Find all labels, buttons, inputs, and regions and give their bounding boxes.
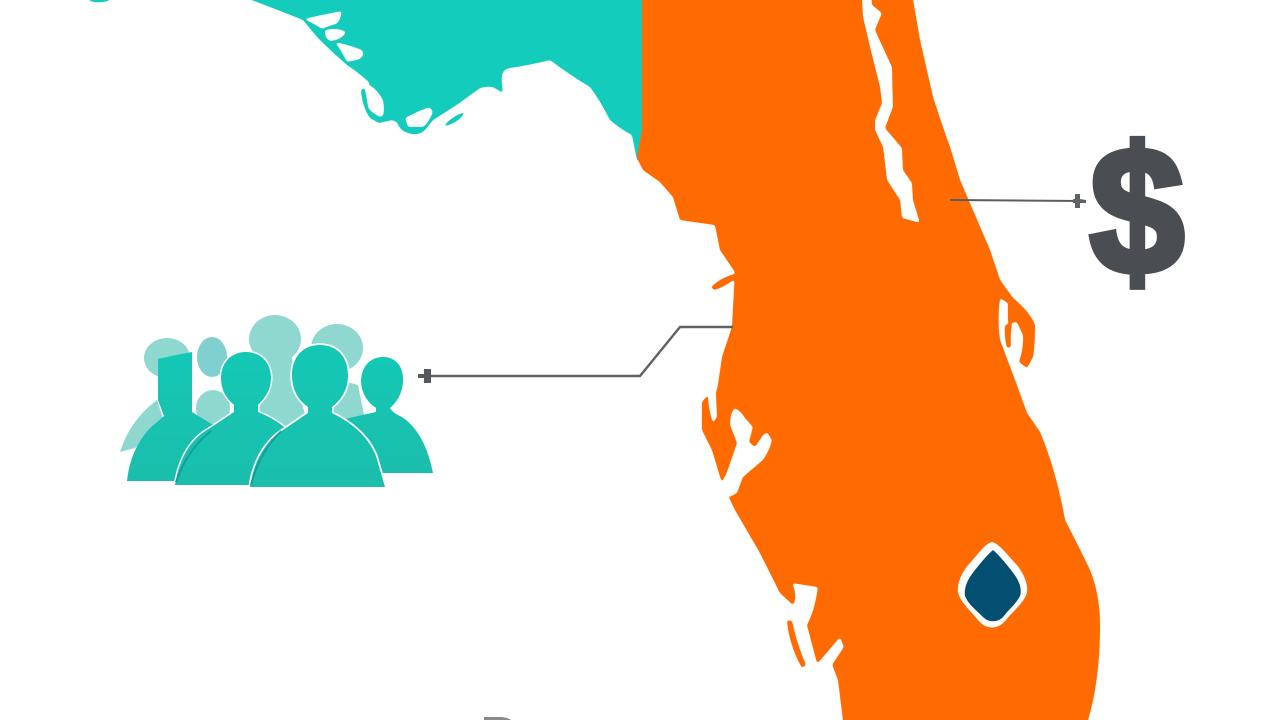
icon: group of people [120, 315, 433, 487]
clipped text fragment at bottom edge [484, 717, 511, 720]
map: teal panhandle region [86, 0, 660, 170]
icon: water drop marker [958, 542, 1027, 628]
middle figure [175, 352, 313, 485]
icon: dollar sign: $ [1090, 111, 1184, 312]
map: orange peninsula region [637, 0, 1100, 720]
left figure [127, 352, 240, 481]
figure separators [176, 431, 281, 485]
main front figure [250, 345, 385, 487]
far right figure [340, 357, 433, 473]
connector line: people to map [418, 327, 733, 383]
connector line: map to dollar [950, 194, 1086, 208]
back row figures [120, 315, 365, 452]
